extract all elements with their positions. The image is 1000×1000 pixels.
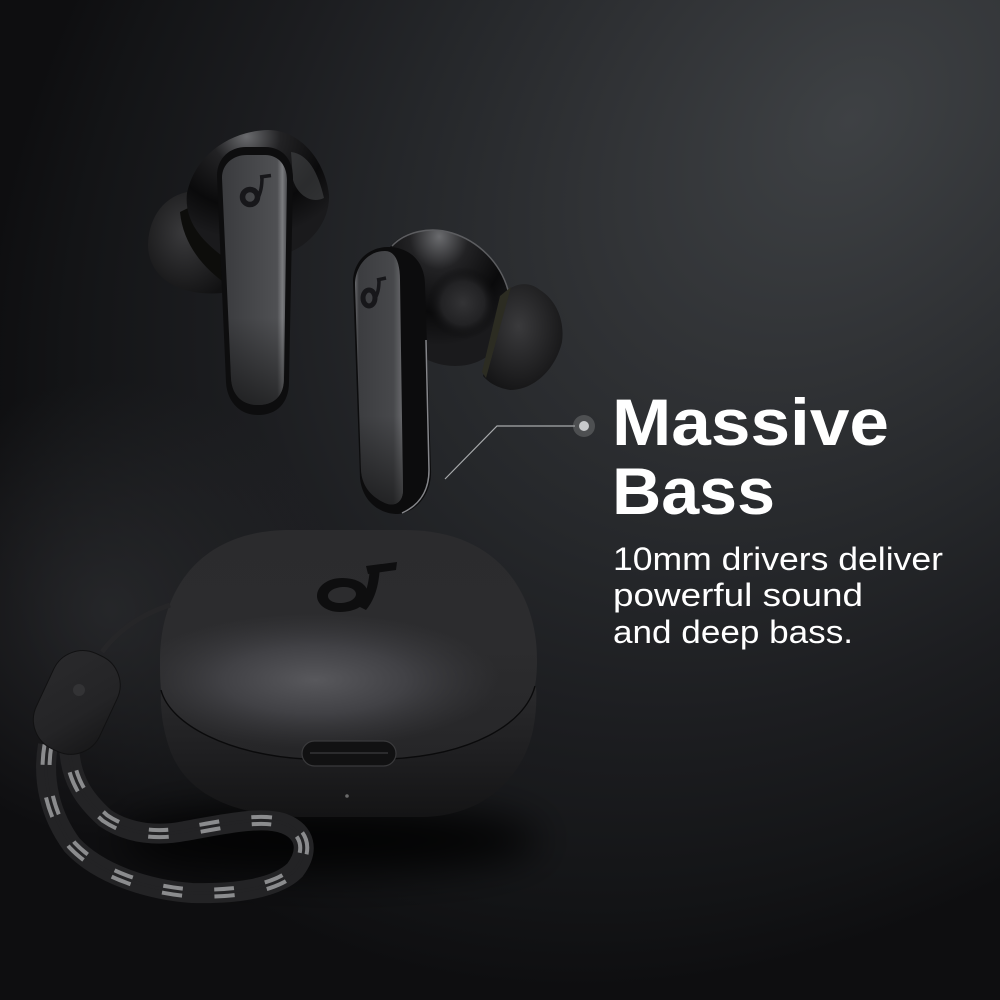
description: 10mm drivers deliver (613, 541, 943, 577)
ear tip (483, 284, 563, 390)
left earbud (148, 130, 329, 415)
description: powerful sound (613, 577, 863, 613)
logo (363, 278, 386, 306)
button (302, 741, 396, 766)
description (613, 541, 943, 650)
lanyard (23, 605, 304, 893)
right earbud (353, 230, 563, 514)
ear tip (148, 192, 230, 293)
case lid (160, 530, 537, 759)
heading: Massive (612, 385, 889, 459)
charging case (160, 530, 537, 817)
led (345, 794, 349, 798)
glossy body (187, 130, 329, 258)
case base (161, 686, 536, 817)
callout line and marker (445, 415, 595, 479)
cord (102, 605, 170, 652)
description: and deep bass. (613, 614, 853, 650)
heading: Bass (612, 454, 775, 528)
heading (612, 385, 889, 528)
logo (242, 176, 271, 204)
stem (353, 247, 431, 514)
braided strap (46, 745, 304, 893)
strap clip (23, 640, 131, 765)
stem (217, 147, 293, 415)
case logo (317, 562, 397, 612)
glossy body (388, 230, 510, 366)
